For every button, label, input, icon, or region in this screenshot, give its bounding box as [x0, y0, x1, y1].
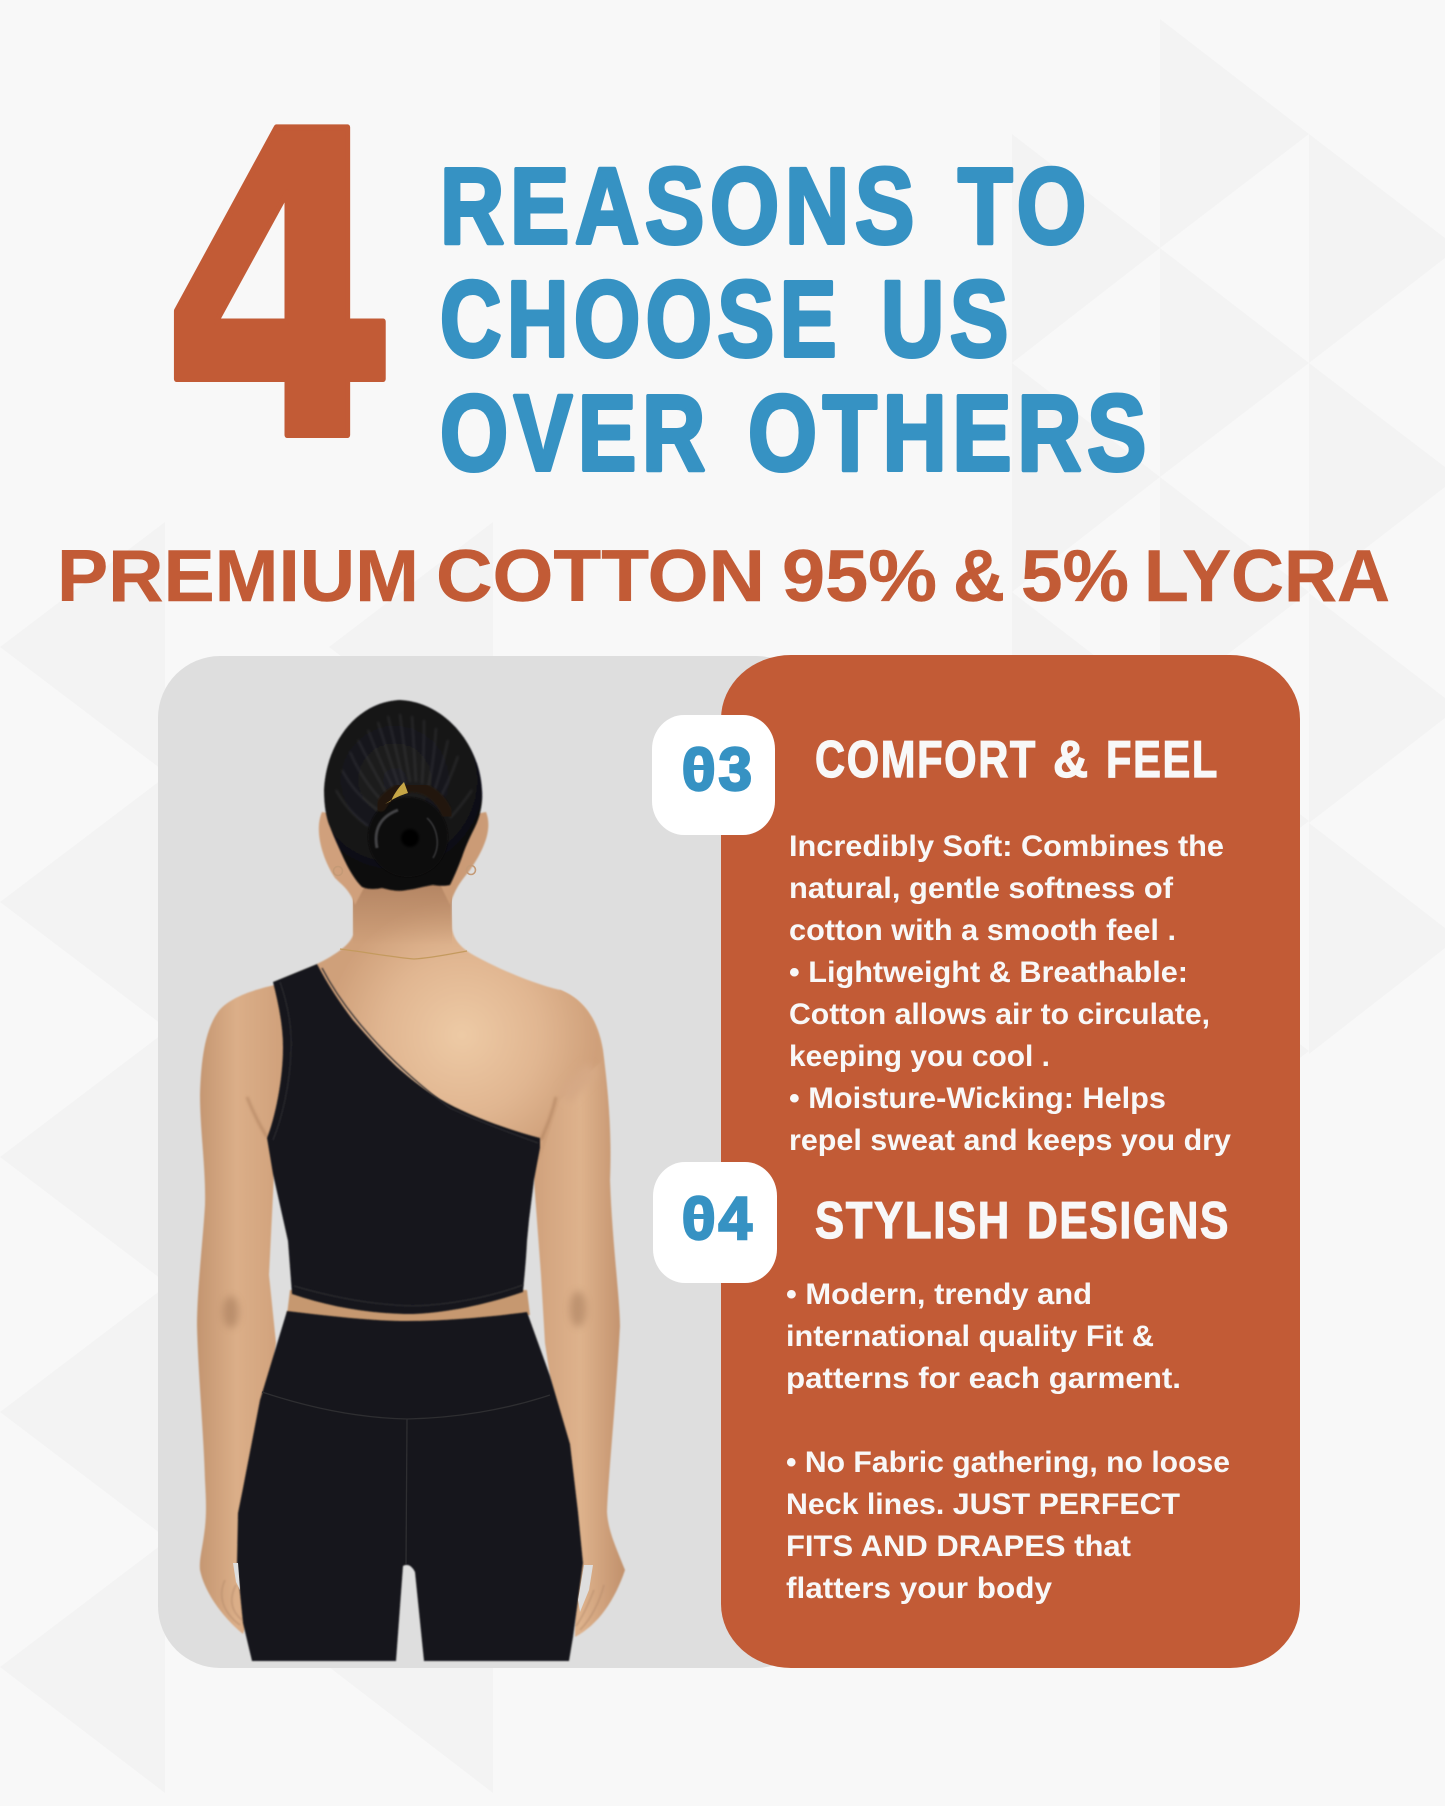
body text comfort and feel: cotton with a smooth feel .	[789, 914, 1176, 947]
badge 03	[652, 715, 775, 835]
big number 4: 4	[161, 43, 399, 535]
body text comfort and feel: Cotton allows air to circulate,	[789, 998, 1210, 1031]
heading stylish designs: STYLISH	[815, 1192, 1011, 1250]
bun shine	[376, 810, 437, 858]
elbow shadows	[223, 1291, 586, 1328]
subtitle: fabric composition: 5%	[1021, 536, 1129, 617]
number 03: 03	[682, 736, 755, 803]
body text stylish designs: • Modern, trendy and	[786, 1278, 1092, 1311]
grey gaps beside legs	[233, 1563, 593, 1612]
hair strands	[336, 714, 472, 826]
body text stylish designs: Neck lines. JUST PERFECT	[786, 1488, 1180, 1521]
panel: grey photo background	[158, 656, 818, 1668]
left ear and nape	[319, 812, 368, 905]
heading comfort and feel: FEEL	[1106, 731, 1219, 789]
badge 04	[653, 1162, 777, 1283]
title: reasons to choose us over others: CHOOSE	[440, 258, 842, 379]
body text stylish designs: flatters your body	[786, 1572, 1052, 1605]
body text stylish designs: • No Fabric gathering, no loose	[786, 1446, 1230, 1479]
subtitle: fabric composition: LYCRA	[1144, 536, 1390, 617]
right arm	[520, 990, 625, 1637]
black leggings	[237, 1311, 583, 1661]
title: reasons to choose us over others: OVER	[440, 372, 711, 493]
neck, shoulders and upper back	[300, 880, 603, 1160]
body text comfort and feel: keeping you cool .	[789, 1040, 1050, 1073]
midriff skin	[287, 1290, 530, 1325]
body text stylish designs: international quality Fit &	[786, 1320, 1154, 1353]
title: reasons to choose us over others: OTHERS	[748, 372, 1152, 493]
number 04: 04	[682, 1185, 755, 1252]
body text stylish designs: patterns for each garment.	[786, 1362, 1181, 1395]
section 04: stylish designs	[653, 1162, 1230, 1605]
subtitle: fabric composition: 95%	[782, 536, 937, 617]
armpit creases	[247, 1097, 556, 1140]
title: reasons to choose us over others	[440, 145, 1152, 493]
left arm	[197, 982, 300, 1634]
earrings	[334, 866, 476, 876]
body text comfort and feel: • Moisture-Wicking: Helps	[789, 1082, 1166, 1115]
body text comfort and feel: • Lightweight & Breathable:	[789, 956, 1188, 989]
heading stylish designs: DESIGNS	[1027, 1192, 1230, 1250]
legging seams	[262, 1392, 550, 1564]
body text stylish designs	[786, 1278, 1230, 1605]
heading comfort and feel: &	[1053, 731, 1090, 789]
body text comfort and feel: repel sweat and keeps you dry	[789, 1124, 1231, 1157]
black one-shoulder top	[267, 964, 540, 1314]
panel: orange reasons card	[721, 655, 1300, 1668]
title: reasons to choose us over others: REASONS	[440, 145, 920, 266]
section 03: comfort and feel	[652, 715, 1231, 1157]
hair bun	[368, 797, 448, 877]
subtitle: fabric composition	[57, 536, 1390, 617]
body text stylish designs: FITS AND DRAPES that	[786, 1530, 1131, 1563]
necklace	[340, 949, 467, 959]
body text comfort and feel: Incredibly Soft: Combines the	[789, 830, 1224, 863]
subtitle: fabric composition: COTTON	[436, 536, 765, 617]
heading stylish designs	[815, 1192, 1230, 1250]
gold hair clip	[385, 782, 408, 804]
heading comfort and feel: COMFORT	[815, 731, 1037, 789]
title: reasons to choose us over others: US	[881, 258, 1014, 379]
shoulder blend	[564, 1068, 592, 1098]
heading comfort and feel	[815, 731, 1219, 789]
photo: woman from behind in black one-shoulder top and leggings	[197, 700, 625, 1661]
right ear and nape	[438, 812, 488, 905]
bun wrap band	[381, 787, 448, 815]
hands	[222, 1580, 604, 1630]
bar across zero of 04	[691, 1214, 705, 1219]
bun centre	[401, 829, 419, 847]
bar across zero of 03	[691, 765, 705, 770]
body text comfort and feel	[789, 830, 1231, 1157]
top seams and folds	[273, 968, 538, 1306]
title: reasons to choose us over others: TO	[958, 145, 1092, 266]
neck shading	[353, 885, 452, 945]
hair	[324, 700, 482, 891]
body text comfort and feel: natural, gentle softness of	[789, 872, 1174, 905]
subtitle: fabric composition: PREMIUM	[57, 536, 419, 617]
subtitle: fabric composition: &	[953, 536, 1005, 617]
